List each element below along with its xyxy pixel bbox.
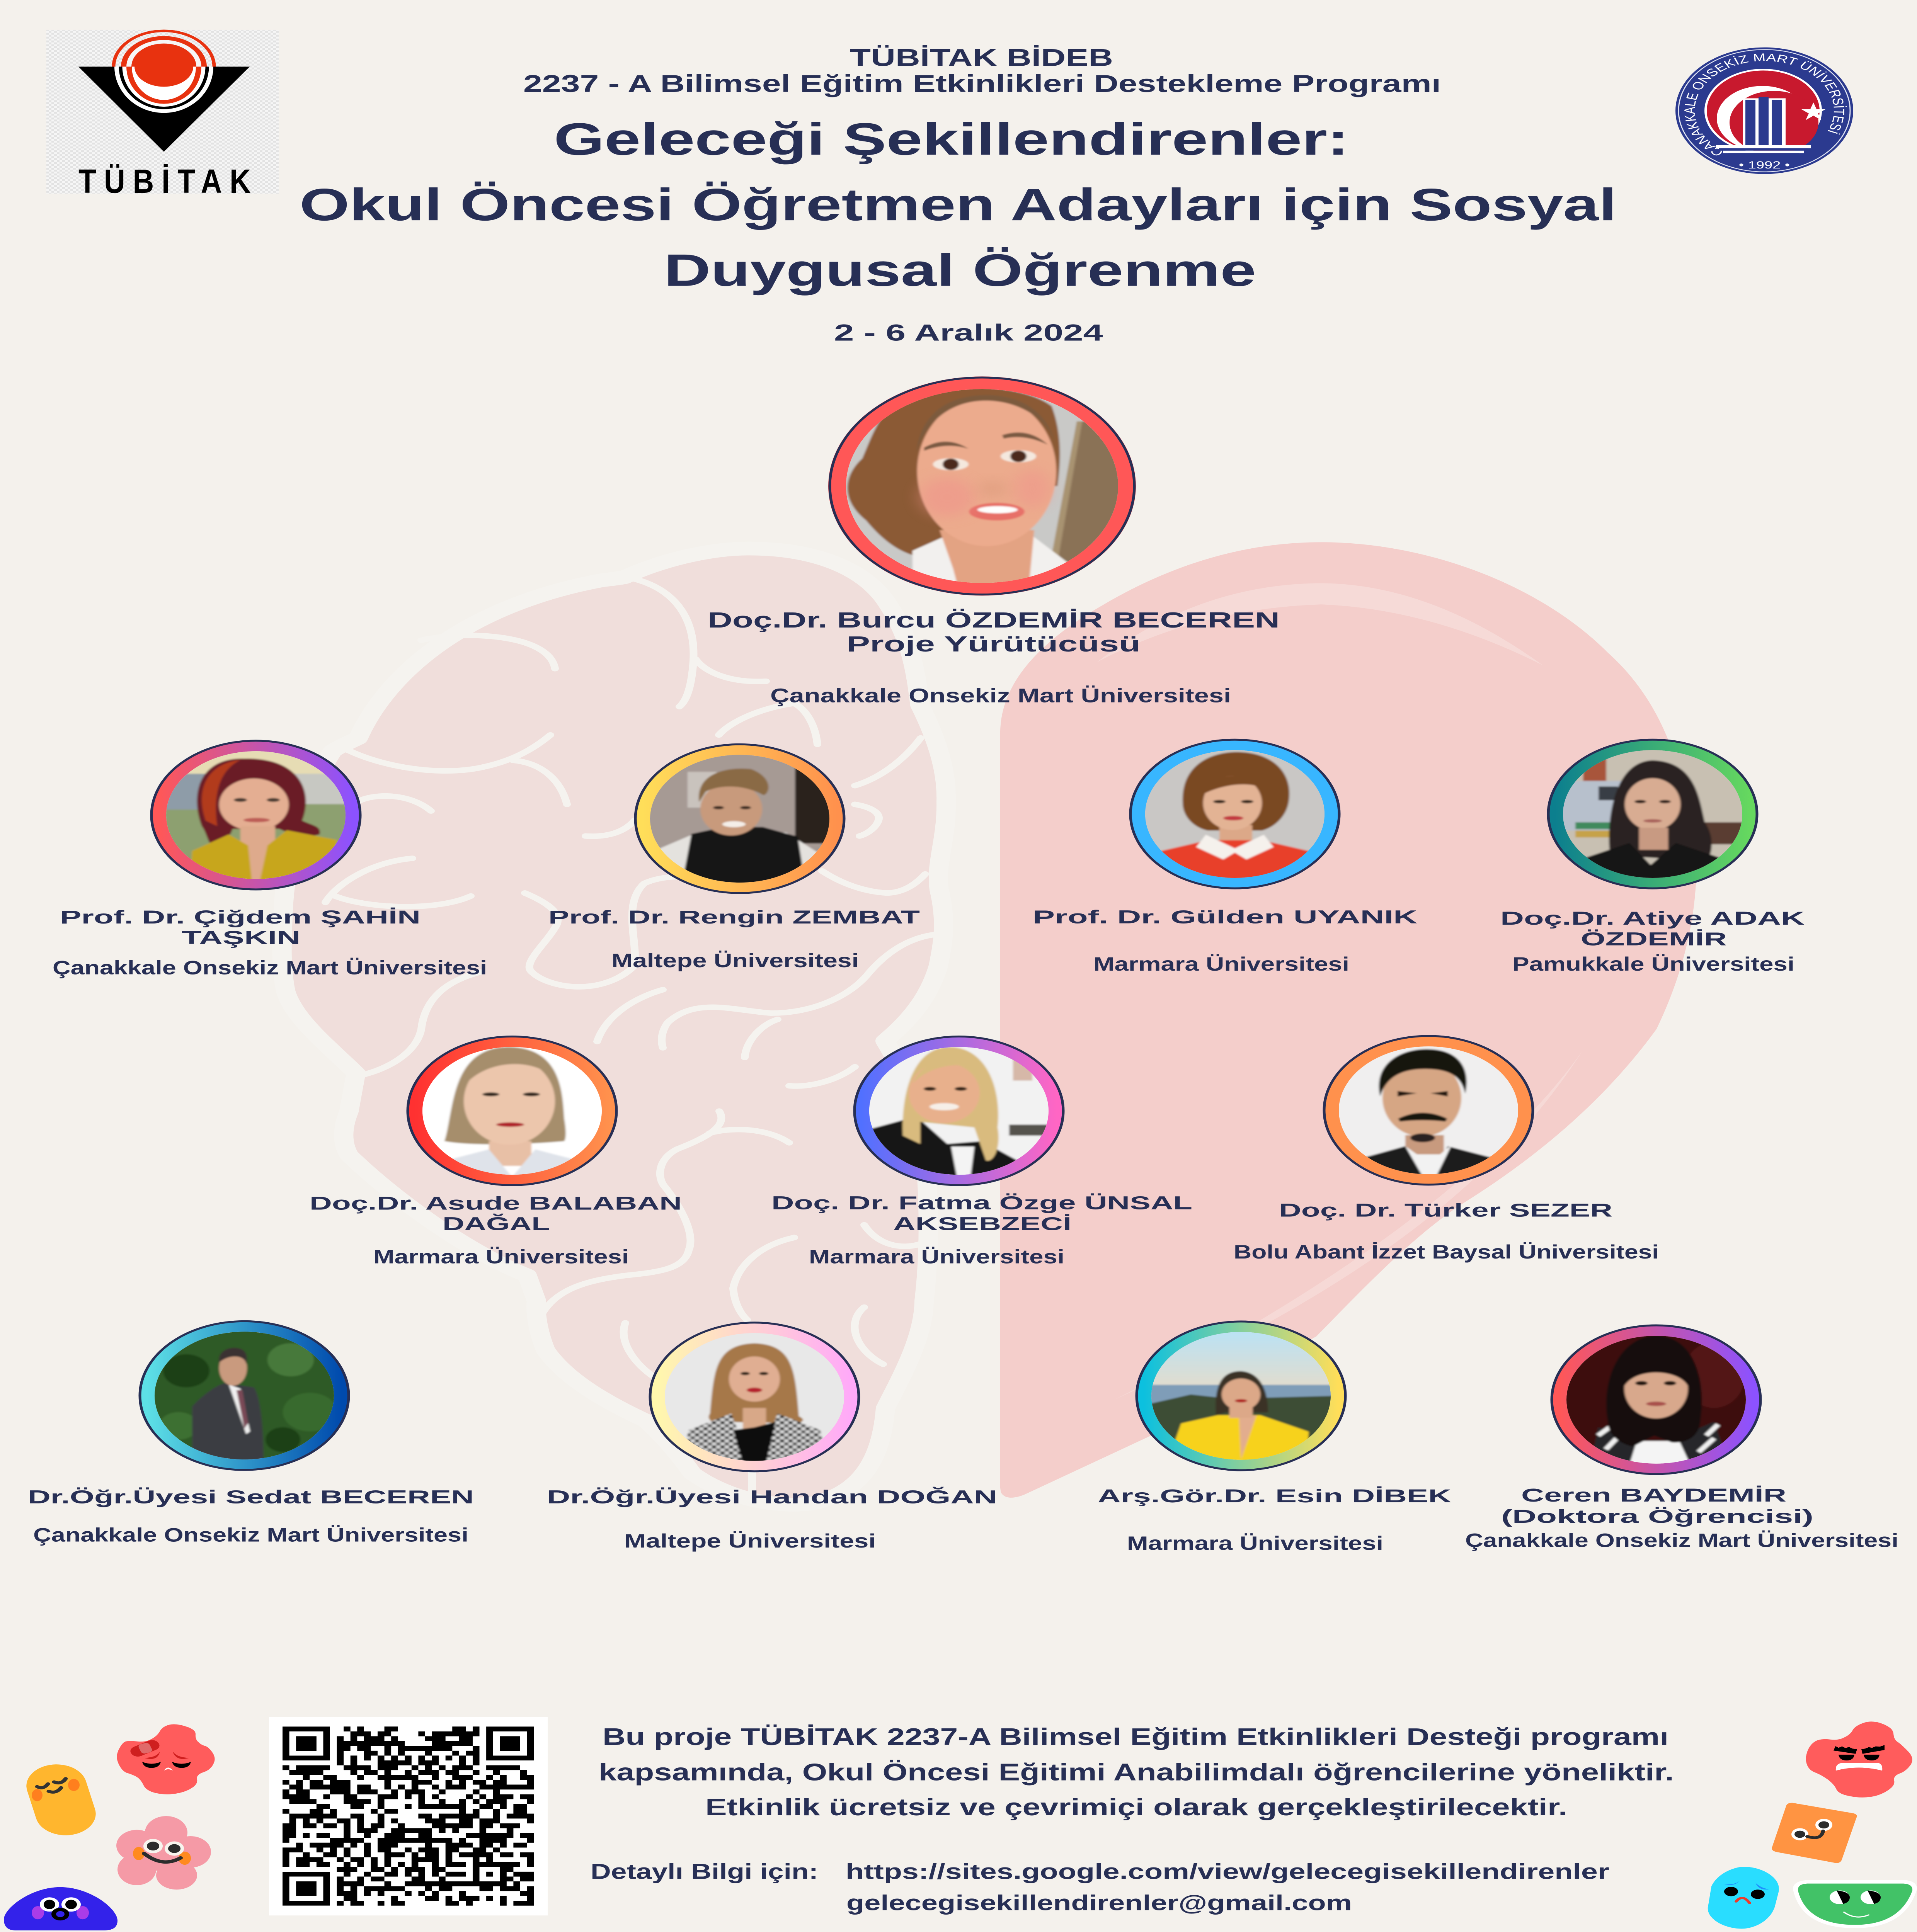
name: Asude: Doç.Dr. Asude BALABAN (310, 1193, 682, 1214)
name: Burcu (708, 607, 1280, 656)
name: Ceren: Ceren BAYDEMİR (1521, 1485, 1786, 1506)
name: Burcu: Proje Yürütücüsü (846, 631, 1141, 656)
name: Fatma (771, 1192, 1192, 1234)
affiliation: Burcu: Çanakkale Onsekiz Mart Üniversitesi (770, 684, 1231, 707)
heart highlight top (1097, 583, 1543, 665)
name: Handan: Dr.Öğr.Üyesi Handan DOĞAN (547, 1486, 997, 1507)
person: Rengin ZEMBAT (548, 744, 920, 971)
person: Çiğdem ŞAHİN TAŞKIN (53, 741, 487, 978)
portrait: Fatma (855, 1036, 1063, 1185)
contact info: https://sites.google.com/view/gelecegisekillendirenler (846, 1860, 1609, 1884)
mascot: cyan sad blob (1708, 1867, 1779, 1929)
affiliation: Rengin: Maltepe Üniversitesi (611, 950, 859, 971)
person: Ceren BAYDEMİR (1465, 1325, 1898, 1551)
heart highlight lower (1114, 1051, 1582, 1400)
name: Atiye: Doç.Dr. Atiye ADAK (1500, 908, 1805, 929)
name: Burcu: Doç.Dr. Burcu ÖZDEMİR BECEREN (708, 607, 1280, 632)
description paragraph: Etkinlik ücretsiz ve çevrimiçi olarak gerçekleştirilecektir. (705, 1794, 1567, 1821)
illustration: brain (282, 549, 946, 1505)
portrait: Esin (1137, 1321, 1345, 1470)
name: Atiye (1500, 908, 1805, 949)
name: Rengin: Prof. Dr. Rengin ZEMBAT (548, 907, 920, 928)
affiliation: Fatma: Marmara Üniversitesi (809, 1246, 1064, 1267)
name: Türker: Doç. Dr. Türker SEZER (1279, 1200, 1612, 1221)
header: program name: TÜBİTAK BİDEB (850, 44, 1113, 71)
portrait: Gülden (1130, 740, 1339, 888)
person: Asude BALABAN DAĞAL (310, 1036, 682, 1267)
affiliation: Çiğdem: Çanakkale Onsekiz Mart Üniversitesi (53, 957, 487, 978)
logo: Çanakkale Onsekiz Mart Üniversitesi: ÇANAKKALE ONSEKİZ MART ÜNİVERSİTESİ (1681, 51, 1847, 159)
affiliation: Türker: Bolu Abant İzzet Baysal Üniversitesi (1234, 1241, 1659, 1263)
affiliation: Handan: Maltepe Üniversitesi (624, 1530, 876, 1552)
header: program name: 2237 - A Bilimsel Eğitim Etkinlikleri Destekleme Programı (523, 70, 1441, 97)
portrait: Türker (1324, 1036, 1533, 1185)
mascot: red blob with bandage (117, 1724, 215, 1794)
name: Atiye: ÖZDEMİR (1581, 929, 1727, 949)
name: Asude: DAĞAL (443, 1213, 550, 1234)
person: Esin DİBEK (1098, 1321, 1452, 1554)
portrait: Ceren (1552, 1325, 1760, 1474)
name: Gülden: Prof. Dr. Gülden UYANIK (1033, 906, 1418, 927)
portrait: Handan (650, 1323, 859, 1471)
mascot: yellow pill (20, 1760, 102, 1840)
mascot: green half circle (1793, 1880, 1917, 1928)
title: Okul Öncesi Öğretmen Adayları için Sosyal (300, 179, 1617, 230)
title: Geleceği Şekillendirenler: (554, 114, 1349, 165)
illustration: half heart (1000, 542, 1696, 1498)
affiliation: Gülden: Marmara Üniversitesi (1093, 953, 1349, 975)
name: Çiğdem (60, 907, 421, 948)
portrait: Rengin (635, 744, 844, 893)
description paragraph: kapsamında, Okul Öncesi Eğitimi Anabilimdalı öğrencilerine yöneliktir. (599, 1759, 1674, 1786)
name: Asude (310, 1193, 682, 1234)
name: Çiğdem: TAŞKIN (182, 927, 300, 948)
person: Sedat BECEREN (28, 1321, 474, 1546)
portrait: Atiye (1548, 740, 1757, 888)
mascot: orange square (1772, 1803, 1857, 1863)
person: Fatma Özge ÜNSAL AKSEBZECİ (771, 1036, 1192, 1267)
affiliation: Sedat: Çanakkale Onsekiz Mart Üniversitesi (33, 1524, 468, 1546)
logo: Çanakkale Onsekiz Mart Üniversitesi: • 1992 • (1739, 159, 1790, 171)
logo: TÜBİTAK (46, 20, 279, 200)
portrait: Sedat (140, 1321, 349, 1470)
person: Gülden UYANIK (1033, 740, 1418, 975)
name: Fatma: Doç. Dr. Fatma Özge ÜNSAL (771, 1192, 1192, 1213)
mascot: angry red blob (1806, 1721, 1912, 1798)
affiliation: Esin: Marmara Üniversitesi (1127, 1532, 1383, 1554)
portrait: Çiğdem (152, 741, 360, 889)
person: Burcu ÖZDEMİR BECEREN (708, 378, 1280, 707)
header: program name (523, 44, 1441, 97)
person: Atiye ADAK ÖZDEMİR (1500, 740, 1805, 975)
name: Fatma: AKSEBZECİ (893, 1213, 1071, 1234)
affiliation: Atiye: Pamukkale Üniversitesi (1512, 953, 1794, 975)
name: Ceren: (Doktora Öğrencisi) (1501, 1506, 1813, 1527)
QR code (269, 1717, 548, 1915)
person: Türker SEZER (1234, 1036, 1659, 1263)
logo: TÜBİTAK: TÜBİTAK (78, 163, 251, 200)
contact info: gelecegisekillendirenler@gmail.com (846, 1891, 1352, 1915)
person: Handan DOĞAN (547, 1323, 997, 1552)
mascot: blue blob (4, 1887, 117, 1930)
description paragraph (599, 1724, 1674, 1821)
title: Duygusal Öğrenme (664, 245, 1256, 296)
mascot: pink flower (116, 1816, 211, 1889)
portrait: Asude (408, 1036, 616, 1185)
title (300, 114, 1617, 296)
name: Sedat: Dr.Öğr.Üyesi Sedat BECEREN (28, 1486, 474, 1507)
description paragraph: Bu proje TÜBİTAK 2237-A Bilimsel Eğitim Etkinlikleri Desteği programı (603, 1724, 1668, 1750)
affiliation: Asude: Marmara Üniversitesi (373, 1246, 629, 1267)
portrait: Burcu (830, 378, 1137, 596)
name: Çiğdem: Prof. Dr. Çiğdem ŞAHİN (60, 907, 421, 928)
date: 2 - 6 Aralık 2024 (834, 320, 1103, 346)
contact info (591, 1860, 1609, 1915)
contact info: Detaylı Bilgi için: (591, 1860, 818, 1884)
name: Esin: Arş.Gör.Dr. Esin DİBEK (1098, 1486, 1452, 1507)
name: Ceren (1501, 1485, 1813, 1527)
